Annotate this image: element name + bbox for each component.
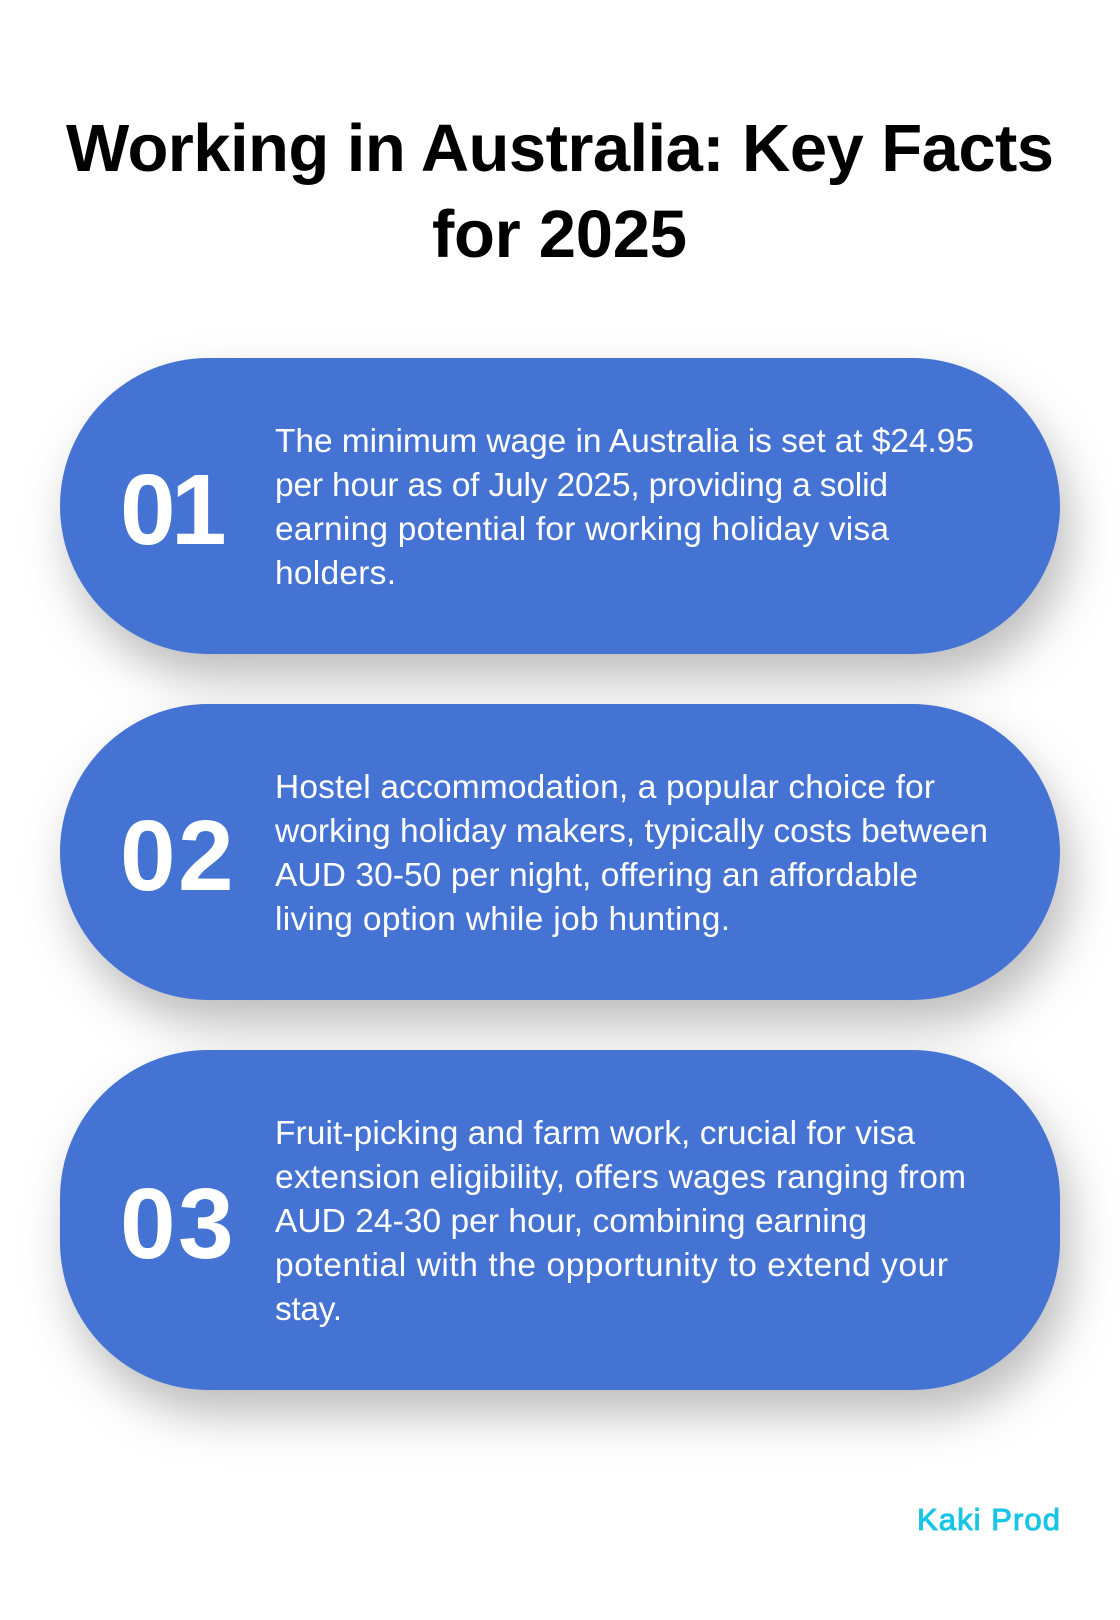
text: hostel accommodation: [274, 769, 988, 938]
title: [66, 111, 1054, 272]
number 03: 03: [120, 1168, 234, 1280]
text: minimum wage: holders.: [275, 555, 396, 592]
title: for 2025: [432, 197, 687, 272]
text: minimum wage: earning potential for working holiday visa: [275, 511, 889, 548]
text: farm work: [275, 1115, 966, 1328]
text: hostel accommodation: AUD 30-50 per night, offering an affordable: [275, 857, 918, 894]
text: farm work: potential with the opportunity to extend your: [275, 1247, 948, 1284]
logo: Kaki Prod: Kaki Prod: [917, 1502, 1060, 1537]
text: minimum wage: [275, 423, 974, 592]
title: Working in Australia: Key Facts: [66, 111, 1054, 186]
panel: fact 02 hostel accommodation: [60, 704, 1060, 1000]
panel: fact 03 farm work: [60, 1050, 1060, 1390]
text: farm work: extension eligibility, offers wages ranging from: [275, 1159, 966, 1196]
text: minimum wage: per hour as of July 2025, providing a solid: [275, 467, 888, 504]
text: minimum wage: The minimum wage in Australia is set at $24.95: [275, 423, 974, 460]
text: farm work: stay.: [275, 1291, 342, 1328]
number 01: 01: [120, 454, 227, 566]
text: farm work: Fruit-picking and farm work, crucial for visa: [275, 1115, 915, 1152]
text: hostel accommodation: living option while job hunting.: [275, 901, 730, 938]
text: farm work: AUD 24-30 per hour, combining earning: [275, 1203, 867, 1240]
panel: fact 01 minimum wage: [60, 358, 1060, 654]
text: hostel accommodation: working holiday makers, typically costs between: [274, 813, 988, 850]
number 02: 02: [120, 800, 234, 912]
text: hostel accommodation: Hostel accommodation, a popular choice for: [275, 769, 935, 806]
